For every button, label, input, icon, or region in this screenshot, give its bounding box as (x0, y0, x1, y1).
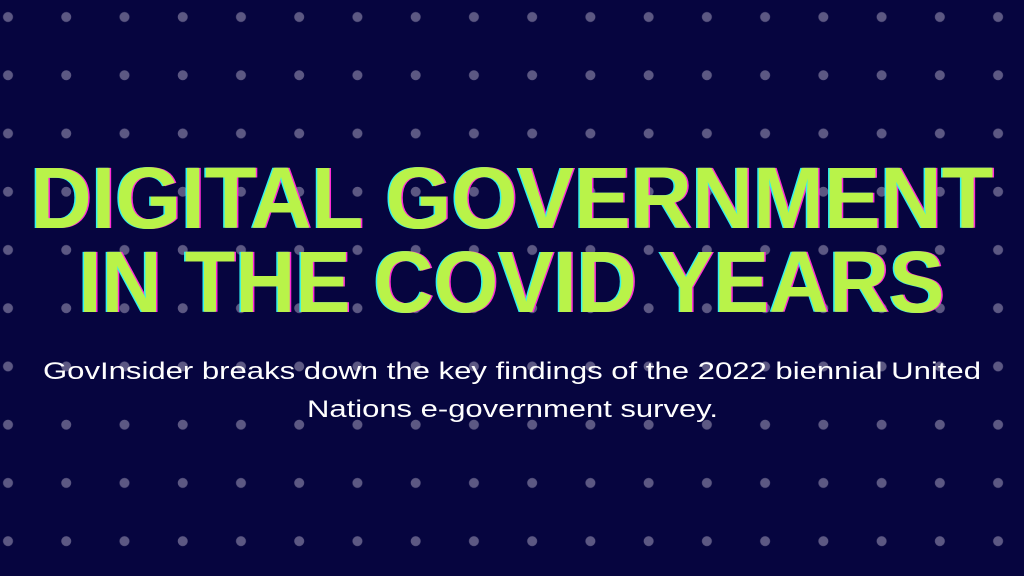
title: DIGITAL GOVERNMENT (32, 150, 995, 247)
title: IN THE COVID YEARS (77, 234, 943, 331)
title: DIGITAL GOVERNMENT (30, 150, 994, 247)
title: IN THE COVID YEARS (78, 234, 944, 331)
subtitle (43, 358, 981, 423)
subtitle: Nations e-government survey. (307, 396, 718, 423)
subtitle: GovInsider breaks down the key findings of the 2022 biennial United (43, 358, 981, 385)
title: IN THE COVID YEARS (80, 234, 946, 331)
title (29, 150, 995, 331)
title: DIGITAL GOVERNMENT (29, 150, 992, 247)
